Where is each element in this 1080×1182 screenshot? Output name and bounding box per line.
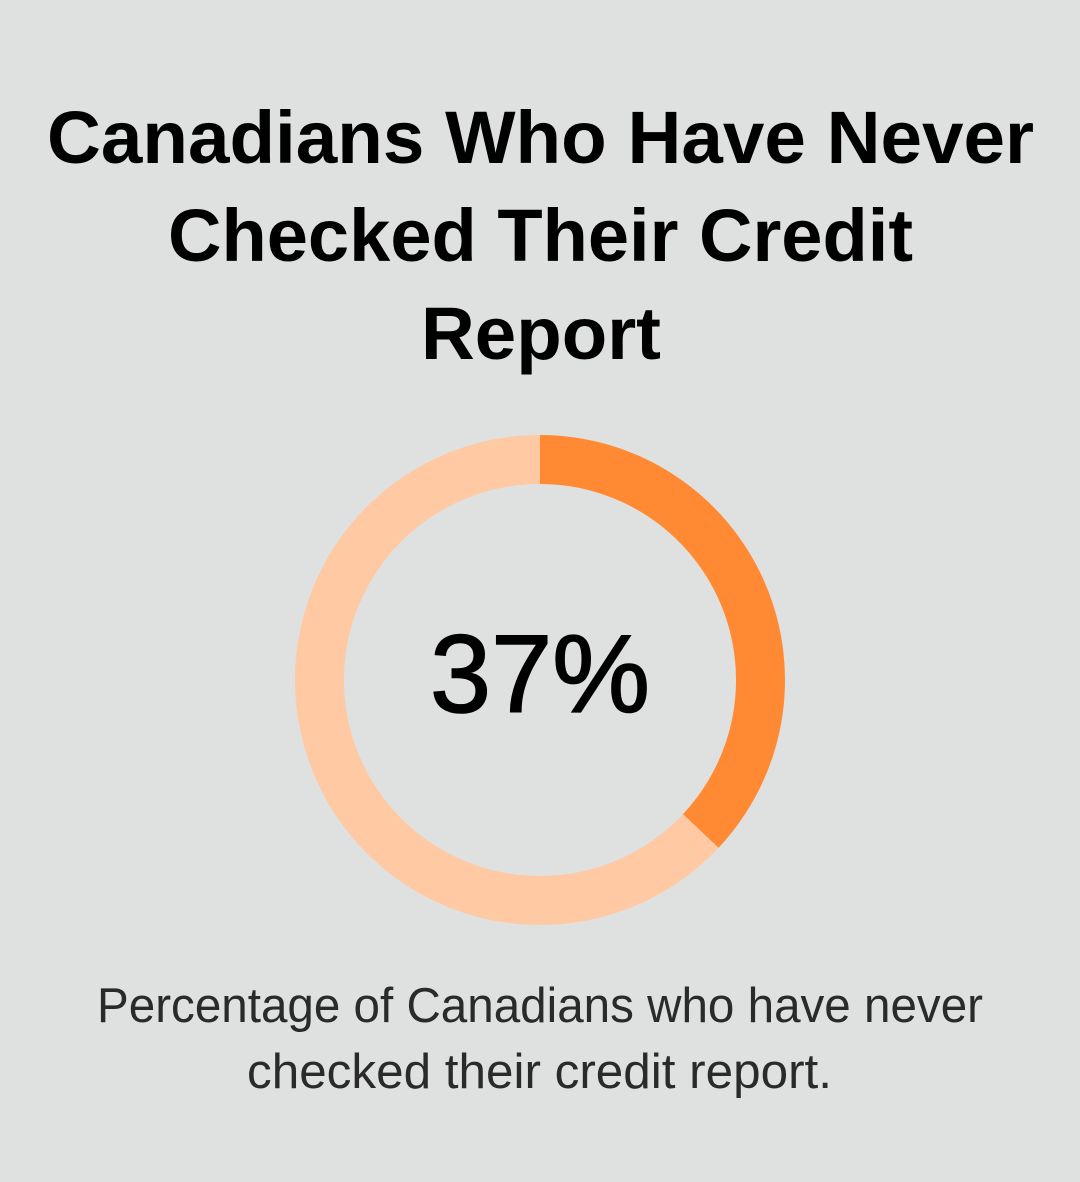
donut track: remaining 63% [320,460,760,900]
donut value: 37% [430,613,650,736]
caption: Percentage of Canadians who have never [97,979,983,1033]
title: Report [421,292,661,375]
donut segment: 37% [540,435,785,848]
title: Canadians Who Have Never [47,96,1034,179]
donut chart: 37% [320,435,785,900]
title [47,96,1034,375]
title: Checked Their Credit [168,194,913,277]
caption [97,979,983,1099]
caption: checked their credit report. [247,1045,832,1099]
